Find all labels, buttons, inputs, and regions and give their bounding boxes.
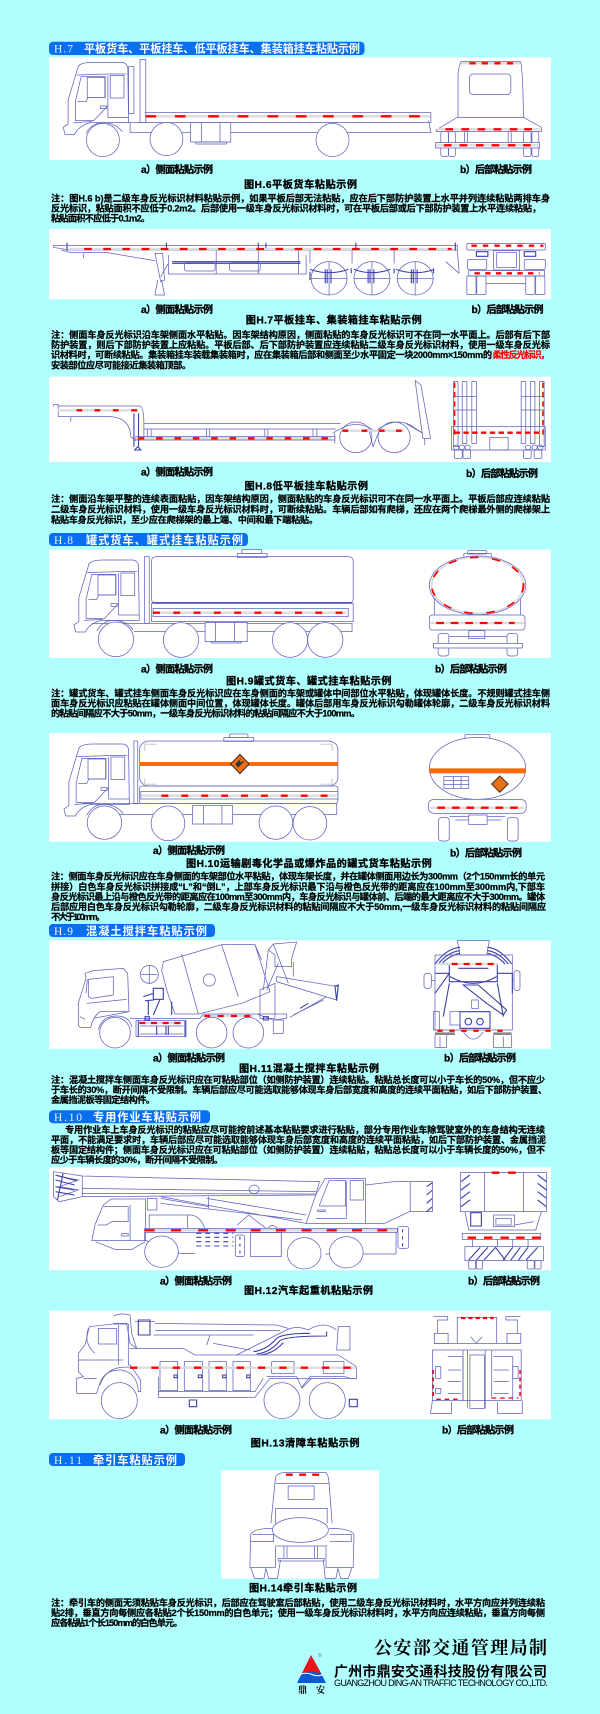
company logo: 鼎 安 <box>298 1684 326 1695</box>
note H.9: 面车身反光标识应粘贴在罐体侧面中间位置，体现罐体长度。罐体后部用车身反光标识勾勒罐体轮廓，二级车身反光标识材料 <box>51 698 550 708</box>
paragraph H.10: 专用作业车上车身反光标识的粘贴应尽可能按前述基本粘贴要求进行粘贴，部分专用作业车除驾驶室外的车身结构无连续 <box>65 1124 545 1135</box>
caption labels H.8: b）后部粘贴示例 <box>466 467 538 480</box>
mixer rear view <box>424 941 520 1047</box>
note H.14 <box>51 1597 545 1628</box>
low flatbed rear view <box>452 382 545 458</box>
caption labels H.8 <box>141 466 538 480</box>
figure title H.9: 图H.9罐式货车、罐式挂车粘贴示例 <box>226 675 392 688</box>
note H.10: 后部应用白色车身反光标识勾勒轮廓，二级车身反光标识材料的粘贴间隔应不大于50mm,一级车身反光标识材料的粘贴间隔应 <box>51 901 546 912</box>
note H.6 <box>51 192 550 224</box>
note H.14: 注：牵引车的侧面无须粘贴车身反光标识，后部应在驾驶室后部粘贴，使用二级车身反光标识材料时，水平方向应并列连续粘 <box>51 1597 545 1608</box>
figure title H.12: 图H.12汽车起重机粘贴示例 <box>244 1284 373 1297</box>
note H.14: 贴2排，垂直方向每侧应各粘贴2个长150mm的白色单元；使用一级车身反光标识材料时，水平方向应连续粘贴，垂直方向每侧 <box>51 1607 545 1619</box>
paragraph H.10: 平面，不能满足要求时，车辆后部应尽可能选取能够体现车身后部宽度和高度的连续平面粘贴，如后下部防护装置、金属挡泥 <box>51 1134 546 1145</box>
note H.9 <box>51 688 550 718</box>
caption labels H.9: b）后部粘贴示例 <box>435 663 507 676</box>
panel: concrete mixer <box>49 940 551 1049</box>
caption labels H.12: b）后部粘贴示例 <box>468 1274 540 1287</box>
flatbed truck side view <box>63 59 431 157</box>
caption labels H.11 <box>153 1051 516 1064</box>
panel: truck crane <box>49 1167 551 1270</box>
note H.8: 二级车身反光标识材料，使用一级车身反光标识材料时，可断续粘贴。车辆后部如有爬梯，还应在两个爬梯最外侧的爬梯架上 <box>51 504 550 514</box>
issuer title: 公安部交通管理局制 <box>374 1637 547 1658</box>
caption labels H.10: b）后部粘贴示例 <box>450 847 522 860</box>
heading: H.8 <box>49 533 248 547</box>
note H.9: 的粘贴间隔应不大于50mm，一级车身反光标识材料的粘贴间隔应不大于100mm。 <box>51 708 360 718</box>
heading: H.9: 混凝土搅拌车粘贴示例 <box>86 924 207 938</box>
tractor drawing <box>249 1472 354 1578</box>
figure title H.7: 图H.7平板挂车、集装箱挂车粘贴示例 <box>246 314 422 327</box>
panel: low flatbed semi-trailer <box>49 377 551 462</box>
note H.9: 注：罐式货车、罐式挂车侧面车身反光标识应在车身侧面的车架或罐体中间部位水平粘贴，体现罐体长度。不规则罐式挂车侧 <box>51 688 550 698</box>
panel: tractor rear view <box>221 1470 379 1579</box>
heading: H.9: H.9 <box>54 926 73 938</box>
heading: H.10: H.10 <box>54 1112 82 1124</box>
caption labels H.6: b）后部粘贴示例 <box>460 163 532 176</box>
heading: H.8: H.8 <box>54 535 73 547</box>
caption labels H.9: a）侧面粘贴示例 <box>141 663 213 676</box>
flatbed truck rear view <box>435 62 541 157</box>
paragraph H.10: 板等固定结构件；侧面车身反光标识应在可粘贴部位（如侧防护装置）连续粘贴，粘贴总长度可以小于车辆长度的50%，但不 <box>51 1144 545 1156</box>
caption labels H.7: b）后部粘贴示例 <box>472 303 544 316</box>
note H.7: 安装部位应尽可能接近集装箱顶部。 <box>51 360 191 370</box>
caption labels H.11: b）后部粘贴示例 <box>444 1051 516 1064</box>
note H.10: 身反光标识最上沿与橙色反光带的距离应在100mm至300mm内，车身反光标识与罐体前、后端的最大距离应不大于300mm。罐体 <box>51 891 546 902</box>
heading: H.10: 专用作业车粘贴示例 <box>93 1110 201 1124</box>
wrecker side view <box>77 1314 357 1419</box>
hazardous tank truck rear view <box>429 734 526 841</box>
caption labels H.10: a）侧面粘贴示例 <box>153 844 225 857</box>
caption labels H.9 <box>141 663 507 676</box>
company name: GUANGZHOU DING-AN TRAFFIC TECHNOLOGY CO.,LTD. <box>334 1678 548 1688</box>
heading: H.11 <box>49 1453 185 1467</box>
figure title H.13: 图H.13清障车粘贴示例 <box>251 1437 360 1450</box>
caption labels H.8: a）侧面粘贴示例 <box>141 466 213 479</box>
panel: hazardous goods tank truck <box>49 733 551 842</box>
figure title H.10: 图H.10运输剧毒化学品或爆炸品的罐式货车粘贴示例 <box>186 857 432 870</box>
semi-trailer rear view <box>467 243 545 295</box>
note H.8: 注：侧面沿车架平整的连续表面粘贴，因车架结构原因，侧面粘贴的车身反光标识可不在同一水平面上。平板后部应连续粘贴 <box>51 493 550 504</box>
paragraph H.10 <box>51 1124 546 1165</box>
note H.10: 注：侧面车身反光标识应在车身侧面的车架部位水平粘贴，体现车架长度，并在罐体侧面用边长为300mm（2个150mm长的单元 <box>51 870 545 882</box>
caption labels H.11: a）侧面粘贴示例 <box>153 1051 225 1064</box>
note H.11: 金属挡泥板等固定结构件。 <box>51 1094 155 1105</box>
note H.8: 粘贴车身反光标识，至少应在爬梯架的最上端、中间和最下端粘贴。 <box>51 514 318 525</box>
note H.14: 应各粘贴1个长150mm的白色单元。 <box>51 1617 182 1628</box>
note H.7: 柔性反光标识， <box>492 349 550 360</box>
figure title H.6: 图H.6平板货车粘贴示例 <box>244 178 357 191</box>
heading: H.8: 罐式货车、罐式挂车粘贴示例 <box>86 533 243 547</box>
caption labels H.13: b）后部粘贴示例 <box>442 1423 514 1436</box>
heading: H.9 <box>49 924 215 938</box>
note H.10 <box>51 870 546 922</box>
panel: tank truck <box>49 549 551 658</box>
crane rear view <box>460 1173 546 1269</box>
caption labels H.7: a）侧面粘贴示例 <box>141 303 213 316</box>
note H.10: 不大于100mm。 <box>51 911 105 922</box>
caption labels H.13 <box>160 1423 514 1436</box>
caption labels H.6 <box>141 163 532 176</box>
hazardous tank truck side view <box>64 734 338 841</box>
heading: H.11: H.11 <box>54 1455 82 1467</box>
company name <box>334 1664 548 1688</box>
caption labels H.7 <box>141 303 544 316</box>
caption labels H.12 <box>160 1274 540 1287</box>
note H.6: 注：图H.6 b)是二级车身反光标识材料粘贴示例，如果平板后部无法粘贴，应在后下部防护装置上水平并列连续粘贴两排车身 <box>51 192 550 204</box>
crane side view <box>54 1172 432 1269</box>
figure title H.11: 图H.11混凝土搅拌车粘贴示例 <box>239 1062 379 1075</box>
caption labels H.13: a）侧面粘贴示例 <box>160 1423 232 1436</box>
semi-trailer side view <box>54 243 459 295</box>
heading: H.11: 牵引车粘贴示例 <box>93 1453 177 1467</box>
heading: H.7: H.7 <box>54 44 73 56</box>
paragraph H.10: 应少于车辆长度的30%，断开间隔不受限制。 <box>51 1154 223 1165</box>
wrecker rear view <box>430 1317 522 1413</box>
low flatbed side view <box>54 381 430 453</box>
caption labels H.12: a）侧面粘贴示例 <box>160 1274 232 1287</box>
figure title H.8: 图H.8低平板挂车粘贴示例 <box>244 480 368 493</box>
note H.11 <box>51 1074 547 1105</box>
heading: H.10 <box>49 1110 210 1124</box>
note H.7: 识材料时，可断续粘贴。集装箱挂车装载集装箱时，应在集装箱后部和侧面至少水平固定一块2000mm×150mm的 <box>51 349 492 360</box>
note H.10: 拼接）白色车身反光标识拼接成“L”和“倒L”，上部车身反光标识最下沿与橙色反光带的距离应在100mm至300mm内,下部车 <box>51 881 545 892</box>
note H.8 <box>51 493 550 525</box>
caption labels H.10 <box>153 844 522 860</box>
company name: 广州市鼎安交通科技股份有限公司 <box>334 1664 547 1680</box>
company logo <box>297 1652 326 1695</box>
panel: flatbed semi-trailer <box>49 229 551 299</box>
note H.11: 于车长的30%，断开间隔不受限制。车辆后部应尽可能选取能够体现车身后部宽度和高度的连续平面粘贴，如后下部防护装置、 <box>51 1084 547 1095</box>
note H.7: 注：侧面车身反光标识沿车架侧面水平粘贴。因车架结构原因，侧面粘贴的车身反光标识可不在同一水平面上。后部有后下部 <box>51 329 550 340</box>
figure title H.14: 图H.14牵引车粘贴示例 <box>249 1582 357 1595</box>
note H.6: 粘贴面积不应低于0.1m2。 <box>51 212 150 224</box>
caption labels H.6: a）侧面粘贴示例 <box>141 163 213 176</box>
panel: wrecker <box>49 1311 551 1419</box>
tank truck rear view <box>429 551 526 656</box>
note H.7 <box>51 329 550 370</box>
company logo: ® <box>318 1652 322 1659</box>
panel: flatbed truck <box>49 57 551 160</box>
tank truck side view <box>74 549 353 657</box>
heading: H.7: 平板货车、平板挂车、低平板挂车、集装箱挂车粘贴示例 <box>84 42 360 56</box>
note H.11: 注：混凝土搅拌车侧面车身反光标识应在可粘贴部位（如侧防护装置）连续粘贴。粘贴总长度可以小于车长的50%，但不应少 <box>51 1074 545 1085</box>
note H.6: 反光标识，粘贴面积不应低于0.2m2。后部使用一级车身反光标识材料时，可在平板后部或后下部防护装置上水平连续粘贴， <box>51 202 541 214</box>
mixer side view <box>78 942 338 1048</box>
note H.7: 防护装置，则后下部防护装置上应粘贴。平板后部、后下部防护装置应连续粘贴二级车身反光标识材料，使用一级车身反光标 <box>51 339 550 350</box>
